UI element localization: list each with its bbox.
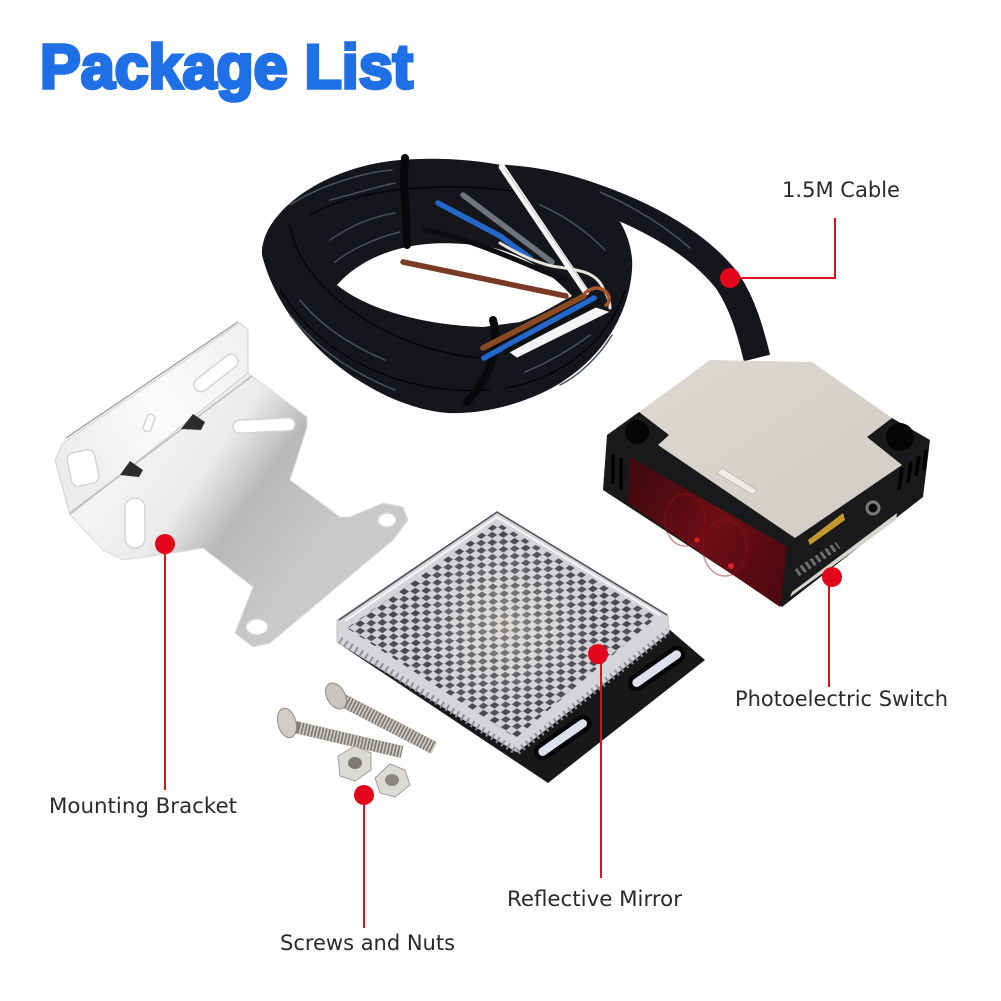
switch vents	[613, 450, 926, 490]
switch red lens	[628, 457, 787, 607]
cable ties	[404, 158, 495, 402]
switch top	[639, 360, 902, 538]
label: 1.5M cable: 1.5M Cable	[782, 178, 900, 202]
switch side label	[791, 495, 897, 592]
label: photoelectric switch: Photoelectric Switch	[735, 687, 948, 711]
leader: mounting bracket	[155, 534, 175, 790]
reflective mirror	[337, 512, 705, 783]
leader: photoelectric switch	[822, 567, 842, 687]
title: Package List	[40, 33, 413, 102]
screw lower	[274, 706, 402, 752]
exposed wires	[403, 167, 610, 358]
mounting bracket	[55, 322, 408, 647]
label: mounting bracket: Mounting Bracket	[49, 794, 237, 818]
cable highlights	[290, 170, 690, 390]
leader: 1.5M cable	[720, 218, 835, 288]
coiled cable	[262, 158, 757, 413]
switch body	[603, 412, 930, 607]
label: reflective mirror: Reflective Mirror	[507, 887, 682, 911]
photoelectric switch	[603, 360, 930, 607]
exit cable	[500, 178, 757, 358]
bracket flange	[55, 323, 248, 515]
leader: reflective mirror	[588, 644, 608, 878]
screws and nuts	[274, 679, 434, 797]
leader: screws and nuts	[354, 785, 374, 928]
mirror slots	[628, 645, 686, 692]
label: screws and nuts: Screws and Nuts	[280, 931, 455, 955]
screw upper	[321, 679, 434, 748]
